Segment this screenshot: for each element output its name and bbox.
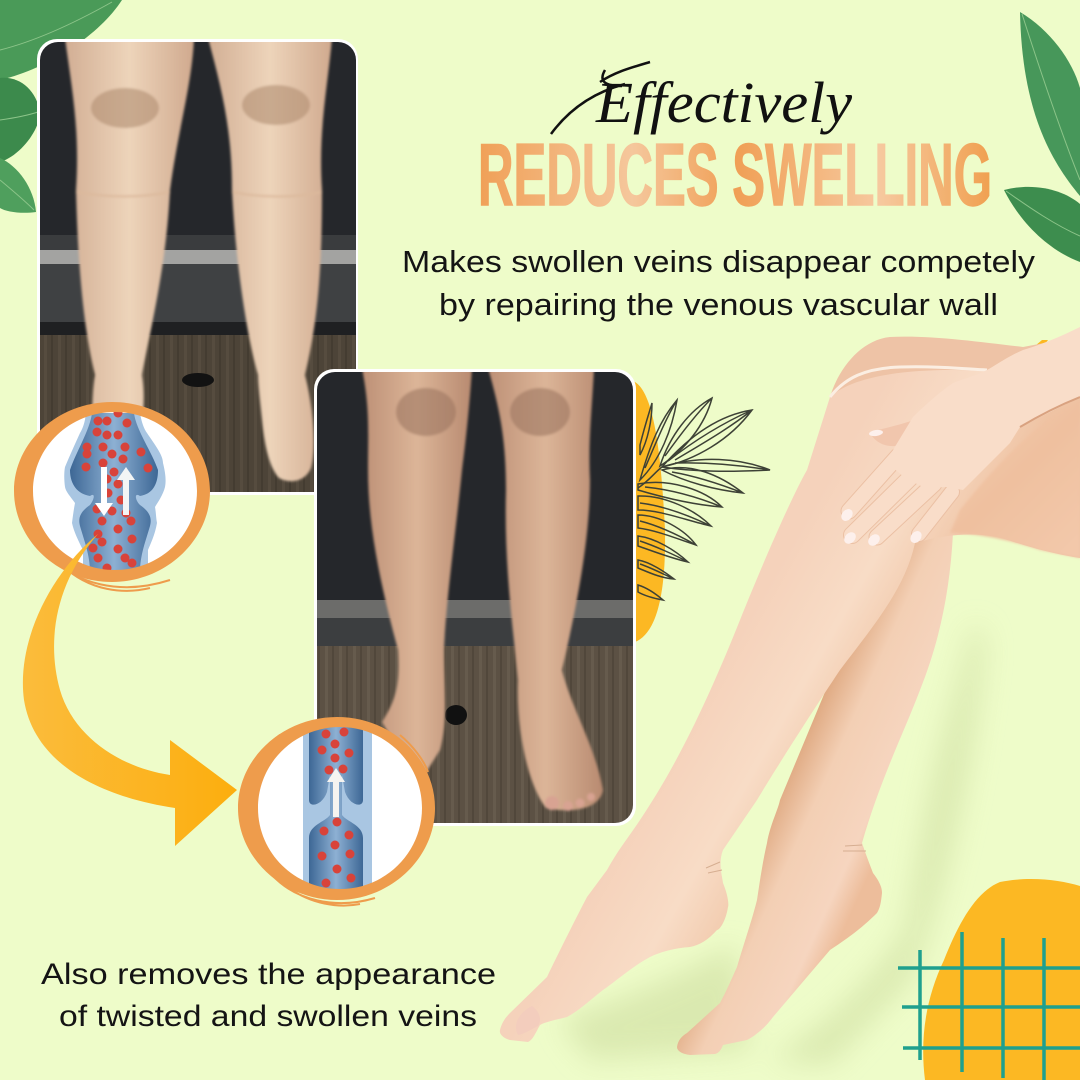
fingers [849,456,952,537]
front leg and thigh [500,370,1080,1042]
left swollen leg [65,38,194,445]
left slim leg [362,368,472,782]
icon: leaves top left [0,0,122,213]
toes [516,1006,540,1035]
right slim leg [488,368,603,810]
panel: yellow blob bottom right [923,879,1080,1080]
vein tube [303,727,372,889]
finger shadows [849,456,952,537]
arrow: curved orange arrow [23,534,237,846]
thigh shading [950,400,1080,558]
bottom left text [41,958,496,1033]
ankle creases [706,845,866,873]
nails [839,429,924,548]
subtitle text [402,244,1036,322]
icon: swollen vein circle [14,402,210,591]
panel: before photo [37,38,358,495]
yellow peek behind arm [1035,340,1048,348]
rear leg [677,530,953,1055]
subtitle text: by repairing the venous vascular wall [439,287,998,322]
leg shadow [560,620,985,1065]
photo: smooth legs [500,327,1080,1055]
toes [545,793,595,811]
brush ring [14,402,210,582]
panel: after photo [314,368,636,826]
icon: leaves top right [1004,12,1080,262]
red blood cells [82,408,152,572]
icon: teal grid [898,932,1080,1080]
icon: healthy vein circle [238,717,435,906]
brush ring [238,717,435,900]
subtitle text: Makes swollen veins disappear competely [402,244,1036,279]
vein outer wall [64,413,166,572]
flow arrow [327,768,345,817]
knee edge highlight [830,367,987,397]
title: script line: Effectively [595,70,852,135]
red blood cells [318,728,356,888]
panel: yellow blob behind second photo [630,380,665,643]
icon: palm leaf [638,398,770,600]
vein inner chambers [70,413,158,572]
flow arrows [95,467,113,516]
right swollen leg [208,38,332,481]
thumb [870,416,925,446]
arm and palm [890,327,1080,490]
bottom left text: Also removes the appearance [41,958,496,991]
upper thigh band [830,337,1060,410]
bottom left text: of twisted and swollen veins [59,1000,477,1033]
